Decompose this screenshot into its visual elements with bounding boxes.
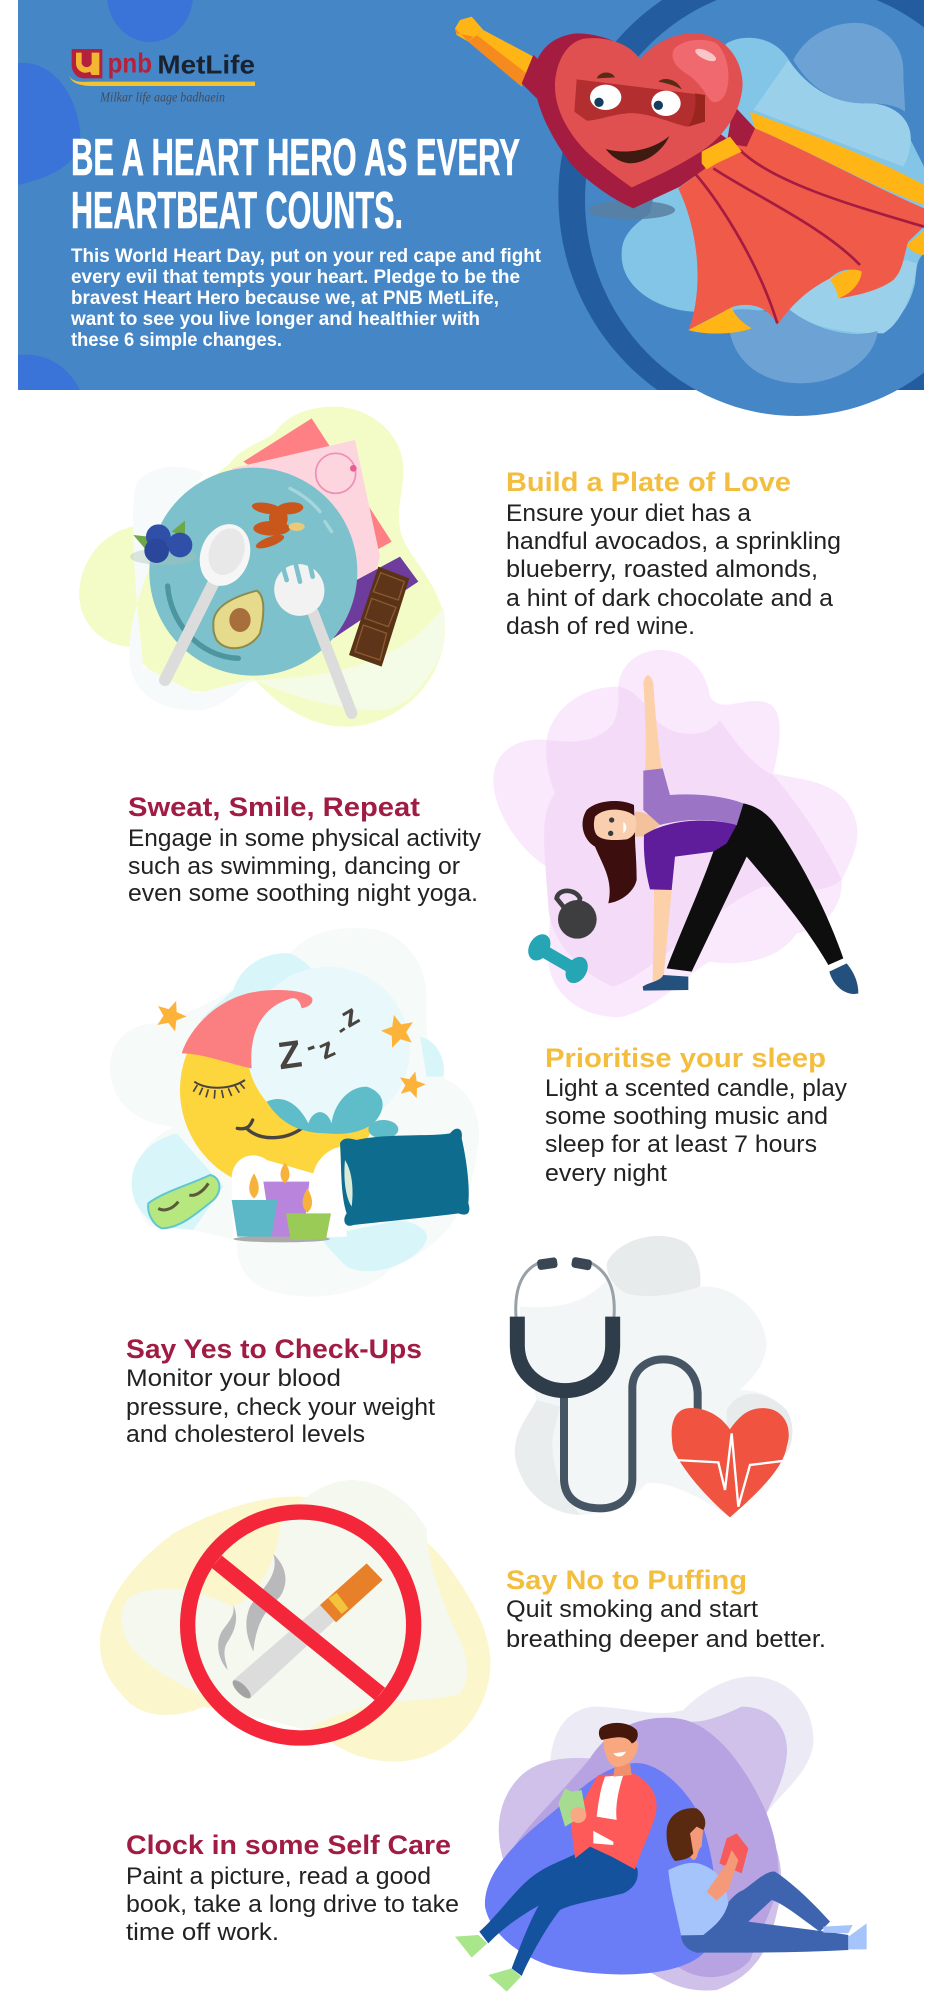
text block: sweat smile repeat: Sweat, Smile, Repeat	[128, 792, 420, 822]
sleep mask	[148, 1175, 219, 1228]
panel: yoga illustration	[493, 650, 858, 1017]
chocolate wrapper	[333, 557, 418, 638]
logo: PNB MetLife: pnb	[108, 48, 152, 79]
man reading	[455, 1723, 657, 1992]
text block: sweat smile repeat: Engage in some physical activity	[128, 825, 482, 852]
title	[71, 129, 520, 240]
panel: stethoscope illustration	[515, 1236, 792, 1517]
cigarette	[218, 1554, 383, 1701]
bean bag	[485, 1763, 716, 1974]
dumbbell	[524, 930, 592, 987]
text block: say yes to check-ups: and cholesterol levels	[126, 1421, 365, 1448]
snore text: -	[301, 1030, 320, 1062]
woman reading	[667, 1808, 867, 1953]
text block: clock in some self care: Paint a picture, read a good	[126, 1863, 431, 1890]
snore text	[275, 998, 365, 1078]
text block: build a plate of love: handful avocados, a sprinkling	[506, 528, 841, 555]
text block: prioritise your sleep: sleep for at least 7 hours	[545, 1131, 817, 1158]
panel: no smoking illustration	[100, 1480, 490, 1762]
text block: sweat smile repeat: such as swimming, dancing or	[128, 853, 460, 880]
panel: sleep illustration	[110, 928, 479, 1297]
text block: sweat smile repeat: even some soothing night yoga.	[128, 880, 478, 907]
panel: self care illustration	[455, 1677, 867, 1992]
intro paragraph: want to see you live longer and healthier with	[70, 309, 480, 330]
text block: build a plate of love: dash of red wine.	[506, 613, 695, 640]
intro paragraph: these 6 simple changes.	[71, 330, 282, 351]
prohibition sign	[188, 1512, 414, 1738]
snore text: z	[335, 998, 365, 1034]
text block: say no to puffing: Say No to Puffing	[506, 1565, 747, 1595]
heart with pulse	[672, 1408, 789, 1517]
chocolate bar	[349, 567, 409, 667]
text block: clock in some self care: Clock in some Self Care	[126, 1830, 451, 1860]
text block: prioritise your sleep: Prioritise your sleep	[545, 1043, 826, 1073]
moon	[180, 967, 410, 1240]
text block: say yes to check-ups: Monitor your blood	[126, 1365, 341, 1392]
text block: build a plate of love	[506, 467, 841, 640]
text block: build a plate of love: Build a Plate of Love	[506, 467, 791, 497]
snore text: -	[331, 1016, 352, 1041]
text block: say no to puffing: Quit smoking and start	[506, 1596, 758, 1623]
paper napkins	[232, 418, 392, 600]
almonds	[251, 500, 305, 551]
logo: PNB MetLife	[69, 48, 255, 104]
woman in triangle pose	[583, 675, 858, 994]
intro paragraph	[70, 246, 542, 351]
text block: say yes to check-ups	[126, 1334, 435, 1448]
intro paragraph: bravest Heart Hero because we, at PNB MetLife,	[71, 288, 499, 309]
candles	[232, 1163, 331, 1242]
blueberries	[130, 521, 197, 565]
avocado	[213, 591, 263, 648]
stars	[152, 996, 428, 1099]
title: HEARTBEAT COUNTS.	[71, 182, 403, 240]
logo: PNB MetLife: MetLife	[157, 49, 255, 79]
background circle and blobs	[558, 0, 940, 435]
snore text: z	[313, 1031, 340, 1066]
fork	[267, 550, 352, 713]
text block: build a plate of love: a hint of dark chocolate and a	[506, 585, 833, 612]
text block: clock in some self care: book, take a long drive to take	[126, 1891, 459, 1918]
text block: build a plate of love: Ensure your diet has a	[506, 500, 751, 527]
text block: say no to puffing: breathing deeper and better.	[506, 1626, 826, 1653]
panel: plate of love illustration	[79, 407, 445, 727]
kettlebell	[557, 891, 597, 939]
spoon	[165, 517, 259, 680]
sleeping cap	[182, 990, 312, 1068]
text block: prioritise your sleep: every night	[545, 1160, 667, 1187]
text block: sweat smile repeat	[128, 792, 482, 907]
icon: superhero heart	[455, 17, 924, 334]
text block: build a plate of love: blueberry, roasted almonds,	[506, 556, 818, 583]
stethoscope	[516, 1257, 698, 1508]
text block: prioritise your sleep	[545, 1043, 848, 1187]
intro paragraph: every evil that tempts your heart. Pledge to be the	[71, 267, 520, 288]
text block: say yes to check-ups: Say Yes to Check-Ups	[126, 1334, 422, 1364]
text block: say yes to check-ups: pressure, check your weight	[126, 1394, 435, 1421]
logo: PNB MetLife: Milkar life aage badhaein	[99, 89, 225, 104]
text block: clock in some self care	[126, 1830, 459, 1946]
intro paragraph: This World Heart Day, put on your red cape and fight	[71, 246, 542, 267]
text block: say no to puffing	[506, 1565, 826, 1653]
pillow	[340, 1129, 469, 1226]
title: BE A HEART HERO AS EVERY	[71, 129, 520, 187]
plate	[149, 468, 357, 676]
snore text: Z	[275, 1032, 304, 1078]
text block: prioritise your sleep: some soothing music and	[545, 1103, 828, 1130]
text block: clock in some self care: time off work.	[126, 1919, 279, 1946]
cloud	[267, 1087, 398, 1139]
panel: header banner	[18, 0, 940, 435]
text block: prioritise your sleep: Light a scented candle, play	[545, 1075, 848, 1102]
